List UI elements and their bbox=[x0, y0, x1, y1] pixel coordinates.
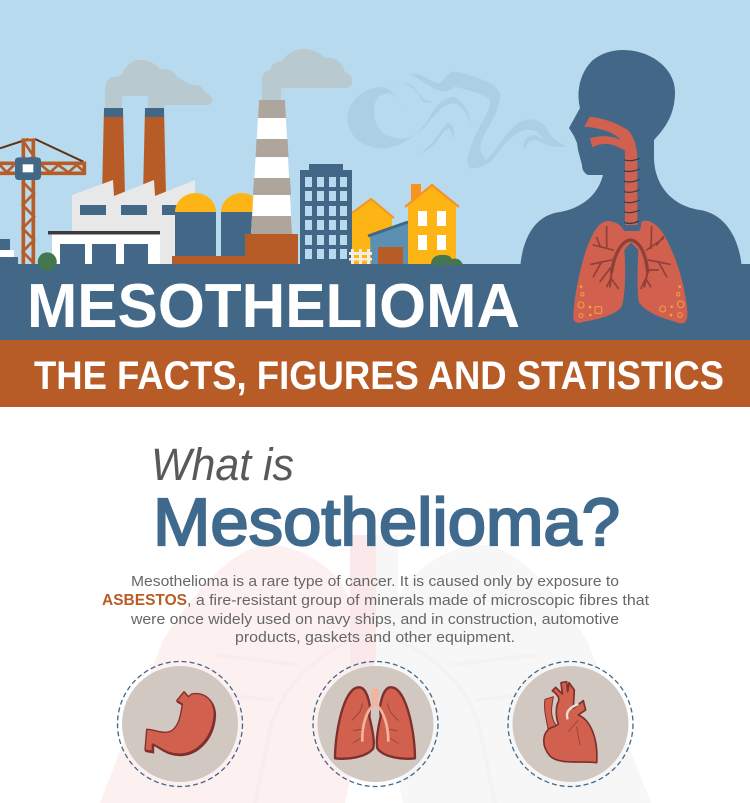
illustration: lungs bbox=[573, 221, 687, 323]
illustration: striped chimney bbox=[172, 100, 298, 264]
sky background bbox=[0, 0, 750, 270]
illustration: toxic fumes bbox=[347, 72, 567, 168]
illustration: factory building bbox=[48, 180, 195, 264]
text block: definition: products, gaskets and other equipment. bbox=[235, 629, 515, 646]
title: MESOTHELIOMA bbox=[27, 272, 520, 341]
heading: What is: What is bbox=[151, 439, 294, 490]
background: faint lungs watermark bbox=[100, 535, 651, 803]
illustration: office block bbox=[300, 164, 352, 264]
illustration: houses bbox=[349, 184, 459, 265]
icon: heart bbox=[508, 662, 633, 786]
text block: definition: Mesothelioma is a rare type of cancer. It is caused only by exposure to bbox=[131, 573, 619, 590]
text block: definition: ASBESTOS bbox=[102, 592, 187, 609]
icon: lungs bbox=[313, 662, 438, 786]
icon: green bush bbox=[38, 252, 57, 271]
illustration: crane bbox=[0, 138, 86, 264]
illustration: human silhouette bbox=[520, 50, 742, 270]
illustration: airway with windpipe rings bbox=[584, 117, 640, 225]
illustration: factory chimneys bbox=[102, 108, 166, 196]
illustration: striped chimney smoke bbox=[262, 49, 352, 100]
text block: definition: , a fire-resistant group of minerals made of microscopic fibres that bbox=[187, 592, 650, 609]
illustration: small building at left edge bbox=[0, 239, 18, 264]
text block: definition bbox=[102, 573, 650, 646]
icon: stomach bbox=[118, 662, 242, 786]
illustration: storage tanks bbox=[175, 193, 262, 258]
heading: Mesothelioma?: Mesothelioma? bbox=[153, 485, 620, 560]
banner: navy title band bbox=[0, 264, 750, 340]
banner: brown subtitle band bbox=[0, 340, 750, 407]
illustration: factory smoke bbox=[105, 60, 212, 108]
text block: definition: were once widely used on navy ships, and in construction, automotive bbox=[130, 611, 619, 628]
icon: green bushes bbox=[431, 255, 463, 265]
